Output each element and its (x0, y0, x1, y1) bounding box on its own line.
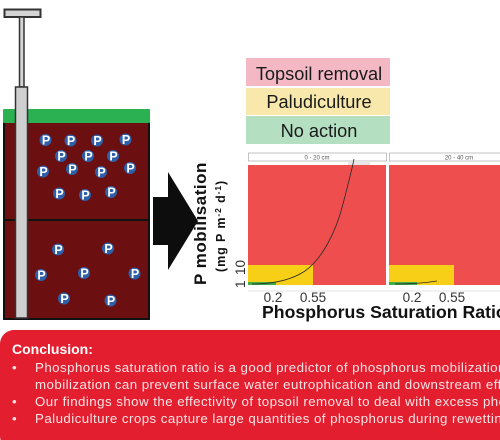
phosphorus particles top layer: P (97, 166, 106, 180)
facet strip: 20-40 cm (390, 153, 500, 162)
conclusion bullets: • (12, 394, 17, 409)
phosphorus particles top layer: P (107, 186, 116, 200)
facet strip: 20-40 cm: 20 - 40 cm (445, 156, 473, 162)
phosphorus particles top layer: P (55, 187, 64, 201)
phosphorus particles top layer: P (57, 150, 66, 164)
corer handle (4, 10, 40, 87)
legend: topsoil removal: Topsoil removal (256, 64, 382, 84)
phosphorus particles top layer: P (126, 162, 135, 176)
y axis unit: d (214, 194, 228, 207)
y axis unit: (mg P m (214, 217, 228, 272)
y tick labels (233, 260, 248, 288)
phosphorus particles bottom layer (35, 242, 140, 308)
phosphorus particles bottom layer: P (80, 266, 89, 280)
conclusion bullets (12, 360, 500, 426)
panel: 20-40 cm (389, 165, 500, 285)
y axis title: P mobilisation (191, 162, 210, 285)
phosphorus particles bottom layer: P (60, 292, 69, 306)
phosphorus particles top layer: P (109, 150, 118, 164)
conclusion bullets: • (12, 360, 17, 375)
grass layer (3, 109, 150, 123)
panel: 0-20 cm (248, 161, 386, 285)
legend: paludiculture (246, 88, 390, 115)
conclusion bullets: Phosphorus saturation ratio is a good predictor of phosphorus mobilization (35, 360, 500, 375)
x tick labels: 0.2 (403, 290, 421, 305)
phosphorus particles bottom layer: P (131, 267, 139, 281)
phosphorus particles top layer: P (81, 188, 90, 202)
arrow (153, 172, 198, 270)
phosphorus particles bottom layer: P (107, 294, 115, 308)
phosphorus particles top layer (37, 133, 136, 202)
legend: no action (246, 116, 390, 144)
x tick labels: 0.2 (264, 290, 282, 305)
phosphorus particles bottom layer: P (37, 268, 46, 282)
conclusion bullets: • (12, 411, 17, 426)
phosphorus particles top layer: P (93, 134, 102, 148)
x tick labels: 0.55 (439, 290, 465, 305)
y tick labels: 10 (233, 260, 248, 275)
y tick labels: 1 (233, 280, 248, 288)
legend (246, 58, 390, 144)
phosphorus particles top layer: P (67, 134, 75, 148)
y axis unit: -2 (213, 207, 223, 217)
phosphorus particles bottom layer: P (104, 242, 113, 256)
y axis unit: -1 (213, 185, 223, 194)
soil layer divider (4, 219, 149, 221)
chart (191, 153, 500, 322)
y axis unit: ) (214, 180, 228, 185)
legend: no action: No action (281, 121, 357, 141)
soil column (4, 122, 149, 319)
phosphorus particles bottom layer: P (54, 243, 63, 257)
curve: 0-20 cm (252, 159, 354, 284)
phosphorus particles top layer: P (42, 134, 50, 148)
phosphorus particles top layer: P (122, 133, 130, 147)
axis line (248, 290, 500, 292)
conclusion heading: Conclusion: (12, 341, 93, 357)
curve: 20-40 cm (395, 281, 437, 284)
corer shaft (16, 87, 28, 318)
legend: paludiculture: Paludiculture (266, 92, 372, 112)
phosphorus particles top layer: P (68, 162, 77, 176)
phosphorus particles top layer: P (39, 165, 48, 179)
soil core diagram (3, 10, 150, 319)
x tick labels (264, 290, 465, 305)
phosphorus particles top layer: P (84, 150, 93, 164)
facet strip: 0-20 cm (248, 153, 386, 162)
facet strip: 0-20 cm: 0 - 20 cm (304, 156, 330, 162)
legend: topsoil removal (246, 58, 390, 86)
x axis title: Phosphorus Saturation Ratio (262, 302, 500, 322)
x tick labels: 0.55 (300, 290, 326, 305)
conclusion panel (0, 330, 500, 440)
conclusion bullets: Paludiculture crops capture large quantities of phosphorus during rewetting (35, 411, 500, 426)
